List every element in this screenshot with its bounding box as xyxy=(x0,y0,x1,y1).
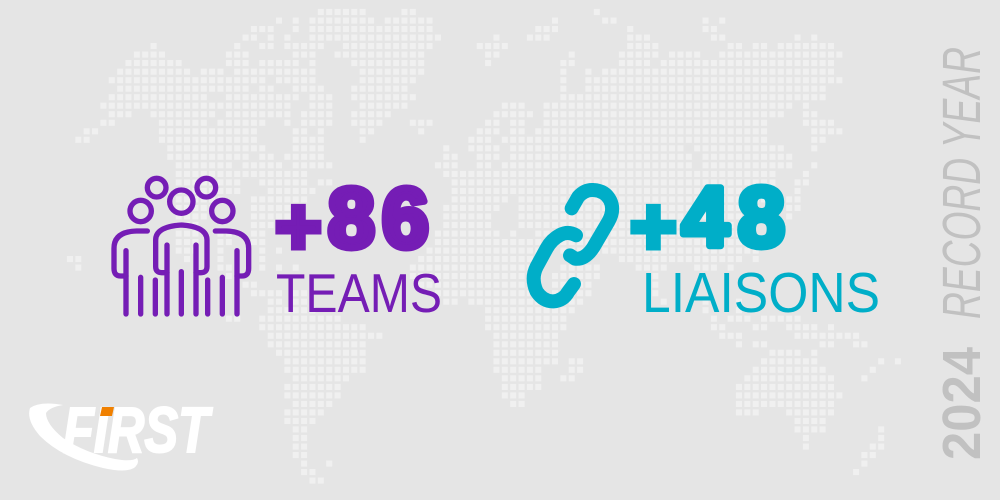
stat: +48: + xyxy=(630,182,677,271)
vertical caption: 2024 record year: 2024 xyxy=(932,347,992,460)
stat: +48 xyxy=(630,170,785,271)
label: LIAISONS: LIAISONS xyxy=(642,261,880,325)
icon: team of people xyxy=(114,178,249,314)
vertical caption: 2024 record year xyxy=(932,47,992,460)
stat: +48: 48 xyxy=(682,170,785,264)
icon: chain link xyxy=(534,190,612,301)
label: TEAMS: TEAMS xyxy=(276,262,442,324)
stat: +86 xyxy=(275,171,429,271)
stat: +86: 86 xyxy=(328,171,429,265)
logo: FIRST: FIRST xyxy=(63,394,213,466)
logo: FIRST xyxy=(29,394,213,470)
stat: +86: + xyxy=(275,182,322,271)
dotted world map xyxy=(67,12,903,481)
